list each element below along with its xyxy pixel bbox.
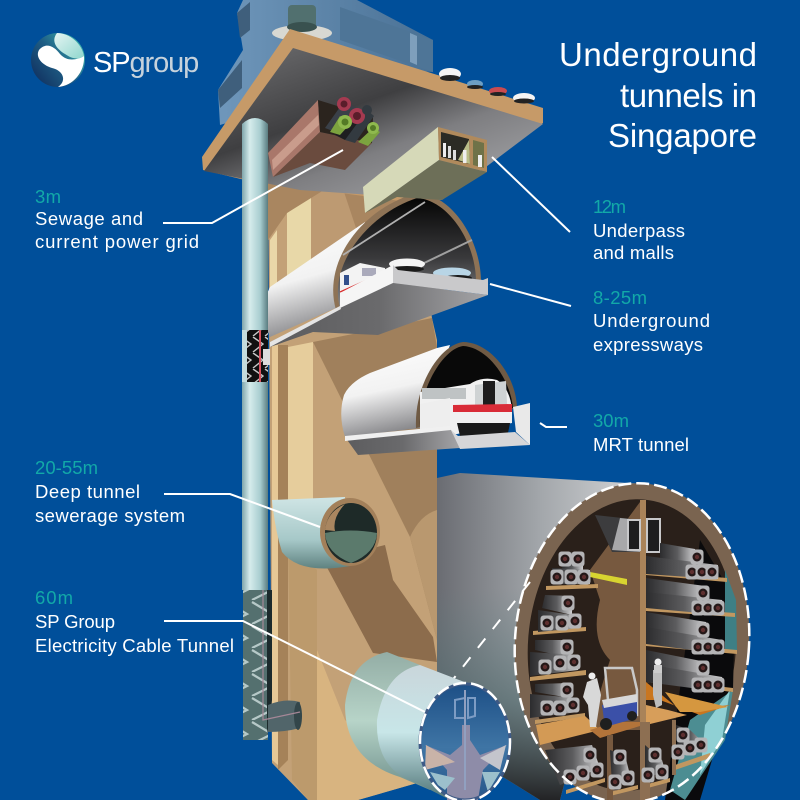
shelves [530,571,737,796]
underpass and malls box [363,127,487,213]
leader: 20-55m [164,494,320,527]
label: 60m SP Group cable tunnel [35,587,234,656]
label: 20-55m deep tunnel sewerage [35,457,185,526]
label: 60m SP Group cable tunnel: 60m [35,587,73,608]
label: 12m underpass and malls: Underpass [593,220,685,241]
title: Underground [559,36,757,73]
dashed outline [503,474,761,800]
label: 3m sewage and power grid: 3m [35,186,61,207]
label: 3m sewage and power grid: Sewage and [35,208,143,229]
dashed zoom line [443,582,530,692]
label: 12m underpass and malls: and malls [593,242,674,263]
cars on the surface [439,68,535,104]
yellow pipe [590,572,627,585]
walkway floors [536,682,730,800]
expressway deck [270,265,488,347]
label: 12m underpass and malls [593,196,685,263]
label: 8-25m underground expressways: expressways [593,334,703,355]
label: 20-55m deep tunnel sewerage: Deep tunnel [35,481,140,502]
cable bundle bodies [530,543,722,785]
leader: 8-25m [490,284,571,306]
label: 20-55m deep tunnel sewerage: sewerage system [35,505,185,526]
label: 8-25m underground expressways: Underground [593,310,710,331]
sewage and power grid box [268,97,380,177]
label: 60m SP Group cable tunnel: SP Group [35,611,115,632]
title: Singapore [608,117,757,154]
label: 30m MRT tunnel: MRT tunnel [593,434,689,455]
leader: 60m [164,621,425,712]
leader: 30m [540,423,567,427]
logo [31,33,198,87]
label: 3m sewage and power grid: current power grid [35,231,199,252]
central wall [590,502,646,730]
big cable tunnel outer shell [437,473,645,800]
vehicles in expressway [340,258,472,297]
ducts [595,515,660,552]
tan central column [268,125,437,800]
label: 30m MRT tunnel: 30m [593,410,629,431]
label: 20-55m deep tunnel sewerage: 20-55m [35,457,98,478]
cable ends [538,550,724,790]
leader: 12m [492,157,570,232]
workers and cart [583,658,662,730]
label: 8-25m underground expressways: 8-25m [593,287,647,308]
SP Group electricity cable tunnel [345,652,510,800]
label: 12m underpass and malls: 12m [593,196,626,217]
blue rooftop building [218,0,433,125]
expressway tunnel [264,193,488,347]
label: 30m MRT tunnel [593,410,689,455]
MRT tunnel [341,342,530,455]
leader: 3m [163,150,343,223]
deep tunnel sewerage pipe [272,497,380,569]
surface plate [202,29,543,205]
left vertical service pipe [242,118,302,740]
title: tunnels in [620,77,757,114]
big cable tunnel cross-section [503,474,761,800]
cable tunnel lens [420,683,510,800]
logo: SPgroup [93,47,198,79]
MRT train [420,379,512,436]
label: 8-25m underground expressways [593,287,710,355]
label: 60m SP Group cable tunnel: Electricity Cable Tunnel [35,635,234,656]
label: 3m sewage and power grid [35,186,199,252]
title [559,36,757,154]
ring [503,474,761,800]
